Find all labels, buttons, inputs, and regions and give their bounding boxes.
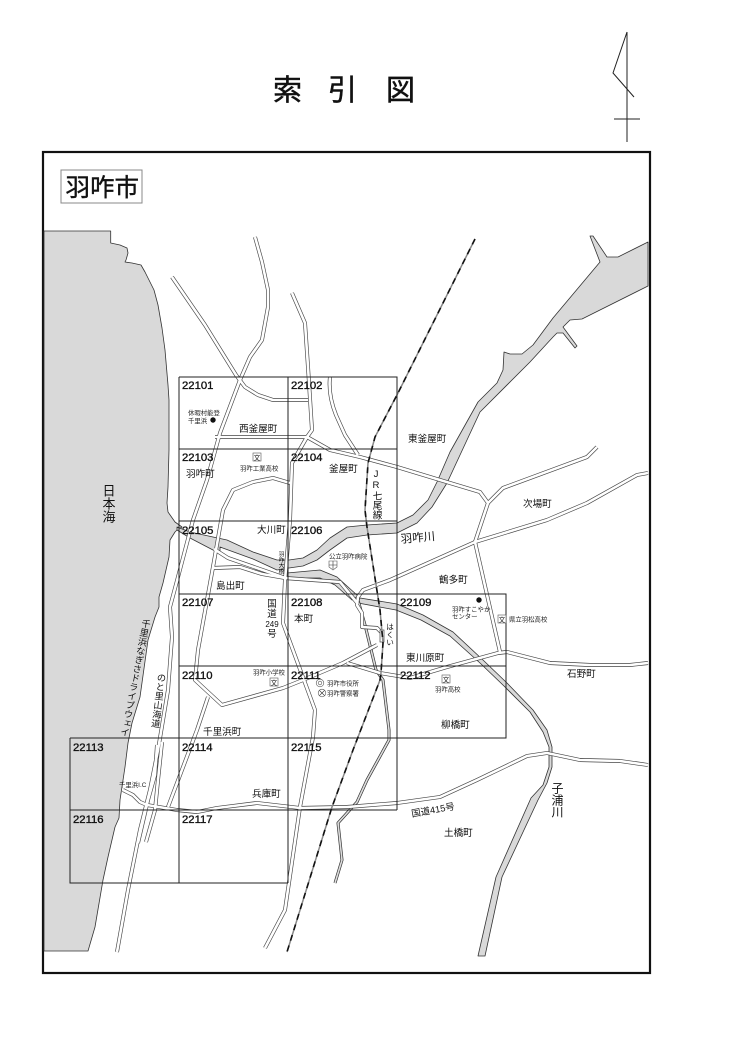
- sheet numbers: 22115: [291, 742, 322, 754]
- sheet numbers: 22107: [182, 597, 213, 609]
- facility: Hakui High School: [435, 675, 461, 694]
- label: Hakui station: はくい: [385, 623, 394, 646]
- sheet numbers: 22109: [400, 597, 431, 609]
- town names: 土橋町: [444, 827, 473, 839]
- facility: Kyukamura Noto Chirihama: [188, 408, 221, 425]
- label: Koura River: 子浦川: [550, 782, 564, 818]
- facility: Hakui Police Station: [318, 688, 360, 698]
- label: National Route 249: [265, 598, 279, 639]
- label: Chirihama interchange: 千里浜I.C: [119, 780, 147, 789]
- sheet numbers: 22104: [291, 452, 322, 464]
- town names: 釜屋町: [329, 463, 358, 475]
- town names: 石野町: [567, 669, 596, 680]
- facility: Hakui High School: 羽咋高校: [435, 684, 461, 694]
- town names: 本町: [294, 613, 314, 625]
- town names: 西釜屋町: [239, 423, 278, 435]
- label: Chirihama Nagisa Driveway: 千里浜なぎさドライブウェイ: [118, 618, 151, 737]
- facility: Hakui Elementary School: 羽咋小学校: [253, 668, 286, 676]
- index grid: [70, 377, 506, 883]
- sheet numbers: 22101: [182, 380, 213, 392]
- facility: Hamatsu High School: 県立羽松高校: [509, 614, 548, 624]
- title: [273, 74, 415, 107]
- sheet numbers: 22116: [73, 814, 104, 826]
- facility: Hakui Sukoyaka Center: [452, 597, 491, 620]
- label: JR Nanao Line: JR七尾線: [370, 469, 382, 521]
- facility: Kyukamura Noto Chirihama: 千里浜: [188, 416, 208, 425]
- label: Noto Satoyama Kaido: のと里山海道: [149, 672, 167, 729]
- town names: 島出町: [216, 580, 245, 592]
- town names: 鶴多町: [439, 574, 468, 586]
- sheet numbers: 22105: [182, 525, 213, 537]
- title: 引: [328, 75, 357, 107]
- facility: Kyukamura Noto Chirihama: 休暇村能登: [188, 408, 221, 417]
- label: Hakui Ohashi bridge: 羽咋大橋: [277, 551, 284, 576]
- water: Koura River: [358, 598, 552, 956]
- facility: Hakui Police Station: 羽咋警察署: [327, 688, 360, 698]
- label: National Route 415: 国道415号: [410, 801, 455, 819]
- facility: Hakui Elementary School: 文: [271, 678, 278, 687]
- facility: Hamatsu High School: 文: [499, 615, 506, 624]
- facility: Hakui High School: 文: [443, 675, 450, 684]
- bridge: Hakui station crossing: [380, 630, 384, 642]
- town names: 東釜屋町: [408, 433, 447, 445]
- panel: index map: [43, 152, 650, 973]
- facility: Hakui Technical High School: 羽咋工業高校: [240, 464, 279, 472]
- sheet numbers: 22117: [182, 814, 213, 826]
- facility: Hakui City Hall: [316, 678, 360, 688]
- facility: Public Hakui Hospital: [329, 552, 368, 570]
- facility: Hakui Technical High School: 文: [254, 453, 261, 462]
- water: narrow canal: [335, 600, 389, 883]
- town names: 柳橋町: [441, 719, 470, 731]
- facility: Hakui City Hall: 羽咋市役所: [327, 678, 360, 688]
- label: National Route 249: 号: [267, 628, 277, 639]
- water: Sea of Japan: [44, 231, 182, 951]
- facility: Hakui Sukoyaka Center: センター: [452, 612, 478, 620]
- sheet numbers: 22114: [182, 742, 213, 754]
- facility: Hakui Elementary School: [253, 668, 286, 687]
- city name label: 羽咋市: [66, 174, 139, 202]
- sheet numbers: 22102: [291, 380, 322, 392]
- railway: JR Nanao Line: [287, 239, 475, 952]
- facility: Hakui Sukoyaka Center: 羽咋すこやか: [452, 604, 491, 614]
- title: 図: [386, 75, 415, 107]
- icon: north arrow: [613, 32, 640, 142]
- label: National Route 249: 道: [267, 608, 277, 619]
- sheet numbers: 22111: [291, 670, 321, 682]
- facility: Hakui Technical High School: [240, 453, 279, 472]
- town names: 大川町: [257, 524, 286, 536]
- facility: Public Hakui Hospital: 公立羽咋病院: [329, 552, 368, 560]
- town names: 東川原町: [406, 652, 445, 664]
- label: National Route 249: 249: [265, 620, 279, 629]
- sheet numbers: 22106: [291, 525, 322, 537]
- title: 索: [273, 74, 302, 107]
- water: Hakui River main channel: [177, 236, 648, 570]
- label: National Route 249: 国: [267, 598, 277, 609]
- road network: [117, 237, 648, 952]
- label: Hakui River: 羽咋川: [400, 529, 436, 546]
- sheet numbers: [73, 380, 431, 826]
- town names: [186, 423, 596, 839]
- facility: Hamatsu High School: [498, 614, 548, 624]
- sheet numbers: 22112: [400, 670, 431, 682]
- water: Hakui River south channel: [287, 570, 358, 600]
- town names: 次場町: [523, 498, 552, 510]
- sheet numbers: 22108: [291, 597, 322, 609]
- town names: 千里浜町: [203, 727, 242, 738]
- sheet numbers: 22103: [182, 452, 213, 464]
- sheet numbers: 22110: [182, 670, 213, 682]
- sheet numbers: 22113: [73, 742, 104, 754]
- town names: 兵庫町: [252, 788, 281, 800]
- label: Sea of Japan: 日本海: [100, 484, 116, 523]
- town names: 羽咋町: [186, 468, 215, 480]
